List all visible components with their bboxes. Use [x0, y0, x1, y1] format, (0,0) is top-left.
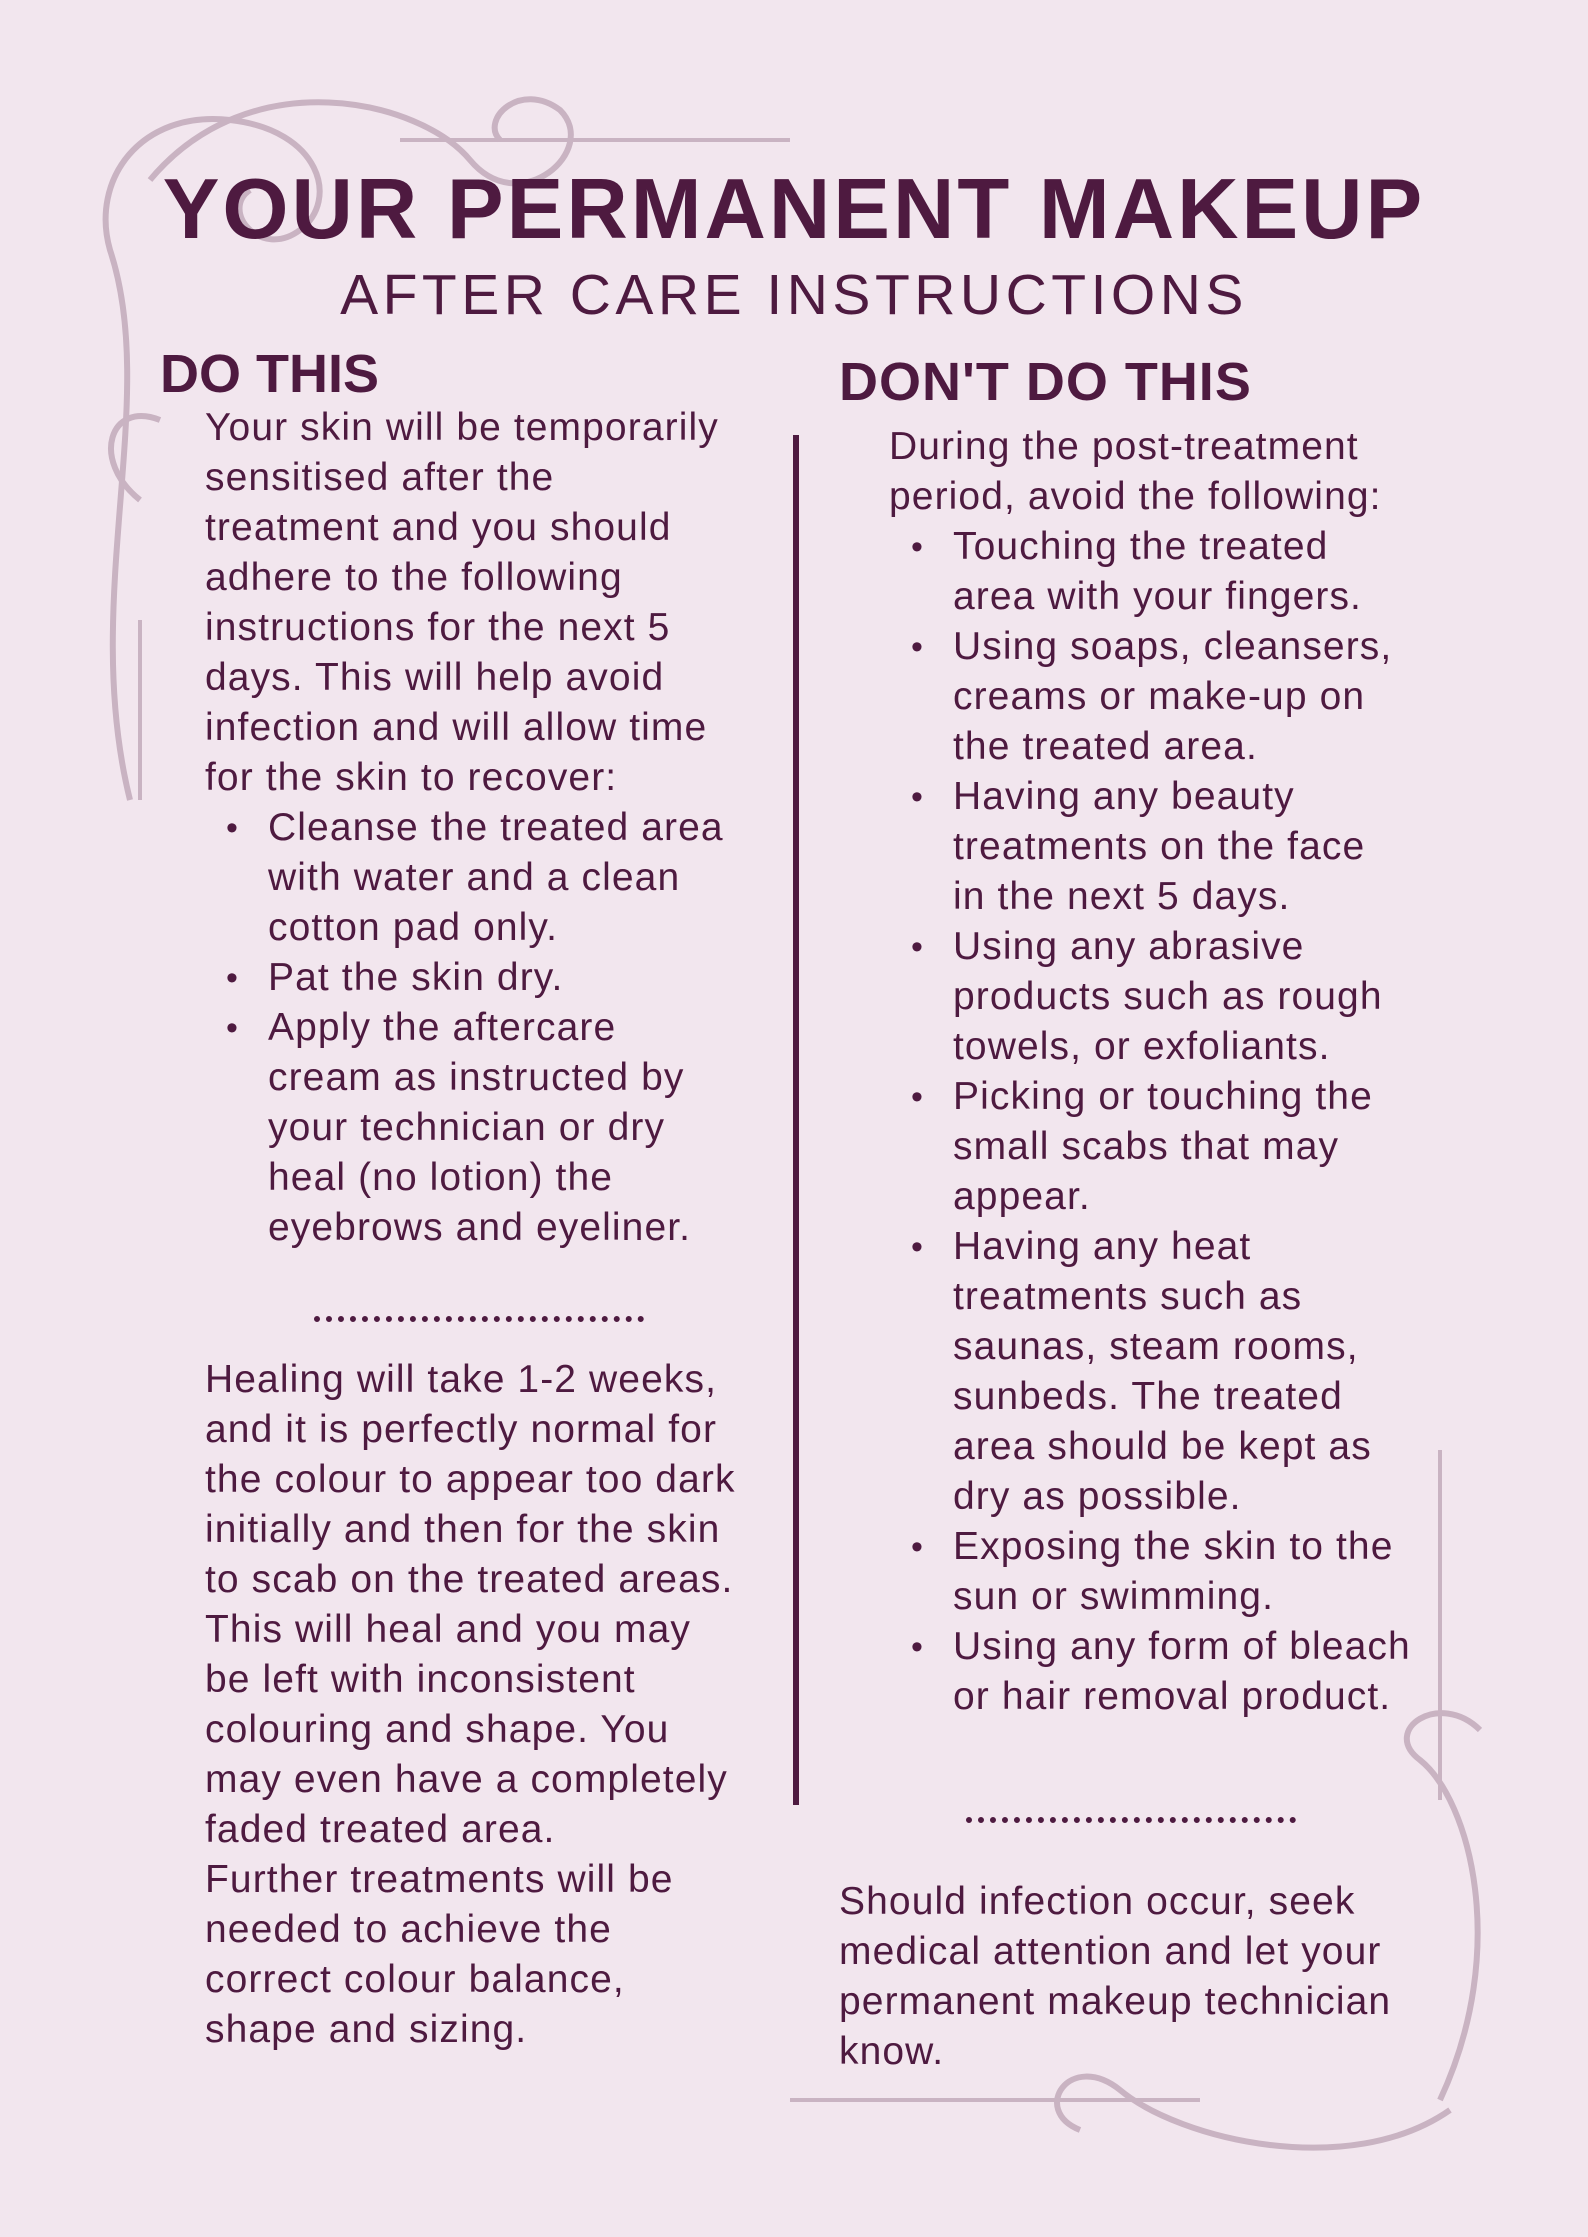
panel: don't do this text: creams or make-up on [953, 675, 1365, 718]
panel: don't do this text: dry as possible. [953, 1475, 1242, 1518]
panel: don't do this text: Touching the treated [953, 525, 1328, 568]
text: healing [205, 1358, 736, 2051]
panel: don't do this text: Having any beauty [953, 775, 1295, 818]
panel: don't do this text: in the next 5 days. [953, 875, 1290, 918]
title: YOUR PERMANENT MAKEUP [163, 162, 1425, 257]
panel: do this text: with water and a clean [268, 856, 680, 899]
panel: don't do this text: area should be kept as [953, 1425, 1372, 1468]
panel: do this text: treatment and you should [205, 506, 672, 549]
panel: do this text: heal (no lotion) the [268, 1156, 613, 1199]
heading: do this: DO THIS [160, 344, 379, 404]
panel: do this text: for the skin to recover: [205, 756, 617, 799]
panel: don't do this text: sun or swimming. [953, 1575, 1274, 1618]
panel: do this text: cotton pad only. [268, 906, 558, 949]
panel: don't do this text: treatments on the face [953, 825, 1365, 868]
panel: do this text: Pat the skin dry. [268, 956, 563, 999]
panel: do this text [205, 406, 724, 1249]
panel: don't do this text: towels, or exfoliants. [953, 1025, 1331, 1068]
text: healing: the colour to appear too dark [205, 1458, 736, 1501]
panel: don't do this text: sunbeds. The treated [953, 1375, 1343, 1418]
text: healing: colouring and shape. You [205, 1708, 669, 1751]
text: healing: be left with inconsistent [205, 1658, 636, 1701]
text: healing: initially and then for the skin [205, 1508, 720, 1551]
panel: don't do this text [889, 425, 1411, 1718]
panel: don't do this text: products such as rough [953, 975, 1383, 1018]
text: healing: This will heal and you may [205, 1608, 691, 1651]
text: infection: permanent makeup technician [839, 1980, 1391, 2023]
divider line [793, 435, 799, 1805]
panel: don't do this text: Exposing the skin to the [953, 1525, 1394, 1568]
panel: don't do this text: During the post-treatment [889, 425, 1359, 468]
panel: do this text: instructions for the next 5 [205, 606, 670, 649]
panel: do this text: eyebrows and eyeliner. [268, 1206, 691, 1249]
panel: don't do this text: or hair removal product. [953, 1675, 1391, 1718]
panel: don't do this text: period, avoid the following: [889, 475, 1382, 518]
panel: do this text: adhere to the following [205, 556, 623, 599]
panel: don't do this text: Using any form of bleach [953, 1625, 1411, 1668]
panel: do this text: Cleanse the treated area [268, 806, 724, 849]
panel: don't do this text: area with your fingers. [953, 575, 1362, 618]
dotted separator right [966, 1817, 1296, 1823]
panel: don't do this text: saunas, steam rooms, [953, 1325, 1359, 1368]
text: healing: needed to achieve the [205, 1908, 612, 1951]
text: infection: Should infection occur, seek [839, 1880, 1355, 1923]
panel: do this text: cream as instructed by [268, 1056, 685, 1099]
text: healing: correct colour balance, [205, 1958, 625, 2001]
text: infection: medical attention and let your [839, 1930, 1381, 1973]
panel: do this text: Your skin will be temporarily [205, 406, 719, 449]
panel: do this text: your technician or dry [268, 1106, 665, 1149]
dotted separator left [314, 1316, 644, 1322]
text: infection [839, 1880, 1391, 2073]
text: healing: Further treatments will be [205, 1858, 674, 1901]
text: healing: may even have a completely [205, 1758, 728, 1801]
panel: don't do this text: Using any abrasive [953, 925, 1304, 968]
text: healing: faded treated area. [205, 1808, 555, 1851]
text: healing: to scab on the treated areas. [205, 1558, 733, 1601]
panel: don't do this text: appear. [953, 1175, 1091, 1218]
panel: don't do this text: Having any heat [953, 1225, 1251, 1268]
subtitle: AFTER CARE INSTRUCTIONS [340, 263, 1248, 327]
panel: do this text: days. This will help avoid [205, 656, 664, 699]
panel: don't do this text: treatments such as [953, 1275, 1302, 1318]
panel: don't do this text: small scabs that may [953, 1125, 1339, 1168]
text: healing: Healing will take 1-2 weeks, [205, 1358, 717, 1401]
panel: do this text: sensitised after the [205, 456, 554, 499]
panel: do this text: Apply the aftercare [268, 1006, 616, 1049]
text: healing: and it is perfectly normal for [205, 1408, 717, 1451]
text: healing: shape and sizing. [205, 2008, 527, 2051]
panel: do this text: infection and will allow time [205, 706, 707, 749]
heading: don't do this: DON'T DO THIS [839, 352, 1252, 412]
panel: don't do this text: Picking or touching the [953, 1075, 1373, 1118]
text: infection: know. [839, 2030, 944, 2073]
panel: don't do this text: the treated area. [953, 725, 1258, 768]
panel: don't do this text: Using soaps, cleansers, [953, 625, 1392, 668]
